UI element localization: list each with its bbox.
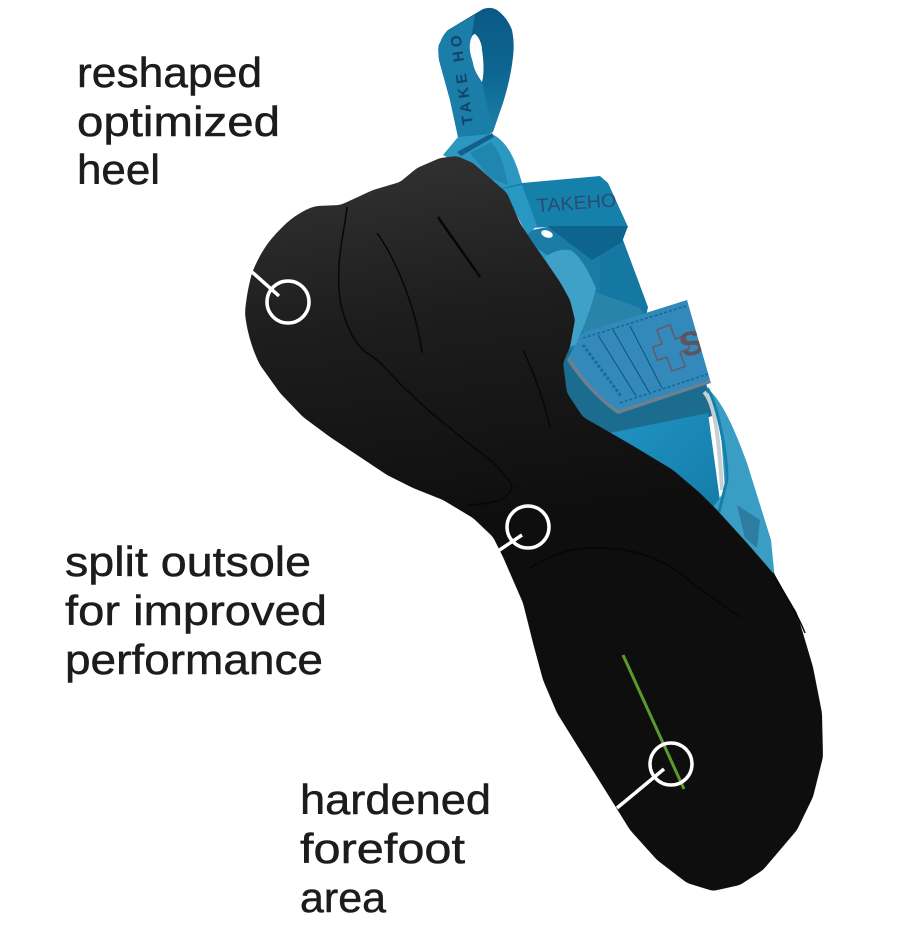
heel tab bbox=[443, 134, 523, 200]
label: split outsole for improved performance bbox=[65, 538, 327, 683]
fleece behind bbox=[580, 290, 660, 345]
marker: split outsole bbox=[498, 506, 549, 551]
outsole bbox=[245, 156, 823, 891]
label: hardened forefoot area: hardened bbox=[300, 776, 491, 823]
label: hardened forefoot area bbox=[300, 776, 491, 921]
label: reshaped optimized heel: heel bbox=[77, 146, 160, 193]
green line bbox=[623, 655, 684, 789]
back panel bbox=[585, 240, 648, 345]
silver trim bbox=[704, 392, 722, 490]
label: split outsole for improved performance: split outsole bbox=[65, 538, 311, 585]
under strap fleece bbox=[555, 345, 712, 445]
label: reshaped optimized heel: optimized bbox=[77, 98, 280, 145]
blue panel bbox=[600, 413, 724, 530]
label: reshaped optimized heel: reshaped bbox=[77, 49, 262, 96]
shoe illustration bbox=[245, 8, 823, 891]
label: split outsole for improved performance: for improved bbox=[65, 587, 327, 634]
marker: forefoot bbox=[617, 743, 692, 808]
velcro strap bbox=[567, 300, 711, 414]
loop webbing text: TAKE HO bbox=[448, 34, 477, 126]
velcro strap: S bbox=[675, 322, 708, 366]
fleece collar bbox=[545, 250, 596, 350]
label: hardened forefoot area: area bbox=[300, 874, 387, 921]
label: reshaped optimized heel bbox=[77, 49, 280, 193]
backing fill behind collar bbox=[522, 226, 600, 370]
pull loop bbox=[438, 8, 514, 142]
marker: heel bbox=[252, 272, 309, 323]
strap text: TAKEHO bbox=[536, 190, 617, 217]
heel strap bbox=[502, 176, 628, 261]
sole creases bbox=[339, 207, 805, 633]
strap logo bbox=[648, 322, 694, 374]
label: split outsole for improved performance: performance bbox=[65, 636, 323, 683]
label: hardened forefoot area: forefoot bbox=[300, 825, 465, 872]
side fleece bbox=[707, 388, 776, 590]
